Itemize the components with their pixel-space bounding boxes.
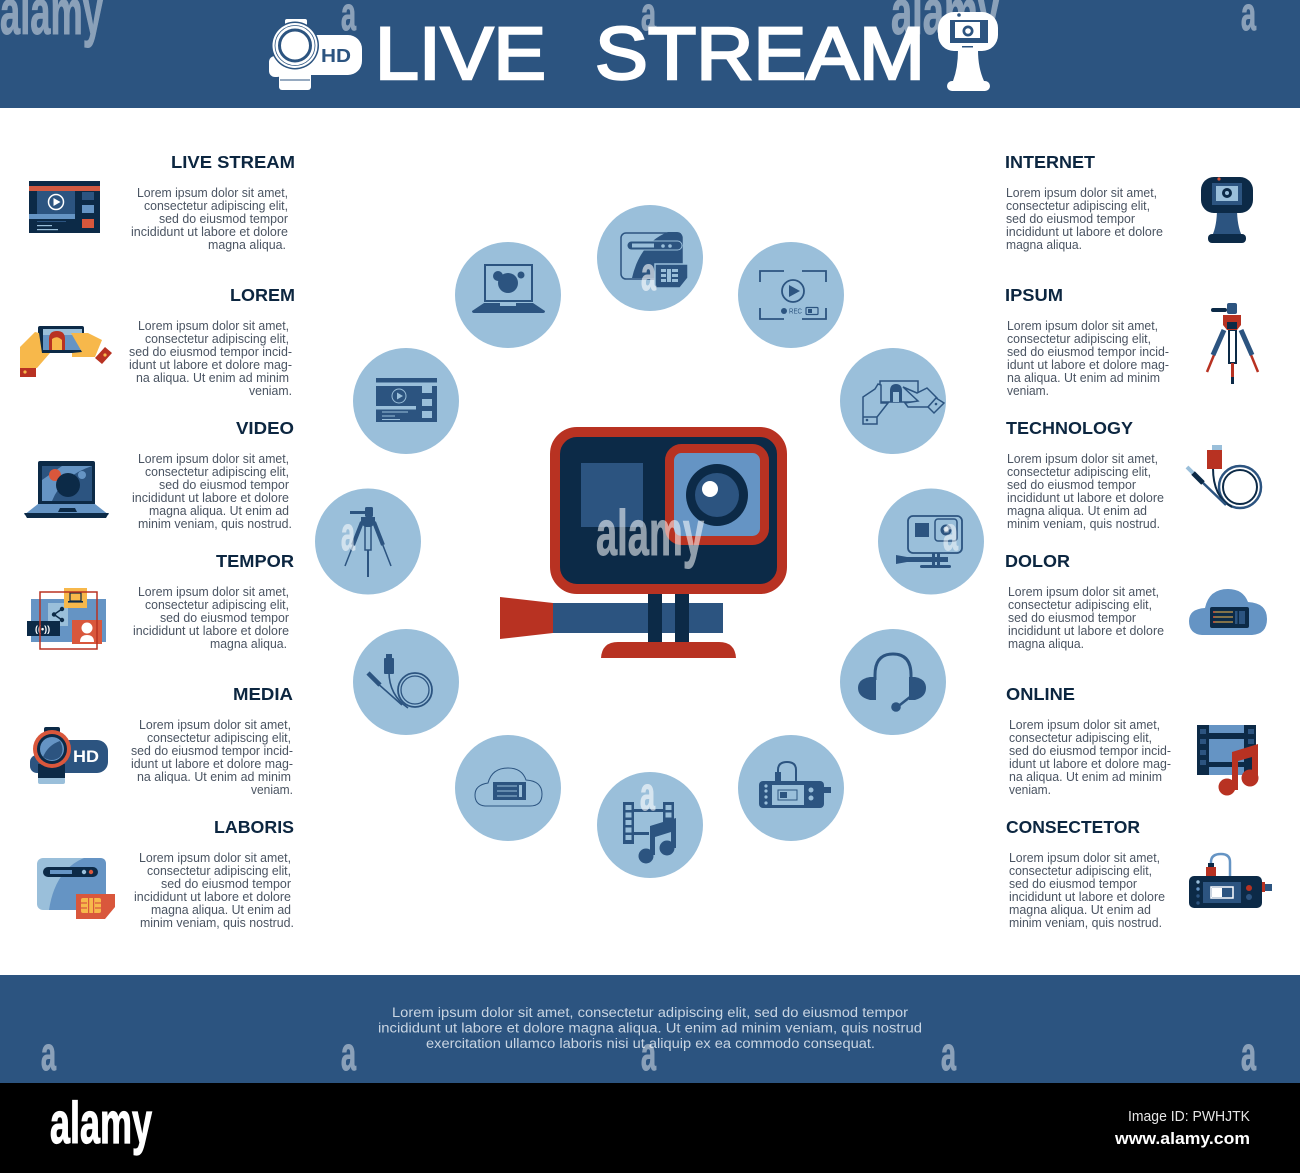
panel: live stream — [29, 152, 295, 252]
text block — [1007, 319, 1169, 398]
black credit bar: www.alamy.com — [1114, 1129, 1250, 1148]
text block: incididunt ut labore et dolore — [131, 225, 288, 239]
text block — [133, 585, 289, 651]
icon: video player — [29, 181, 100, 233]
text block: Lorem ipsum dolor sit amet, — [1009, 718, 1160, 732]
central action camera: alamy — [596, 497, 704, 569]
circle icon: cloud — [455, 735, 561, 841]
icon: hd camcorder — [30, 727, 108, 784]
text block: consectetur adipiscing elit, — [145, 332, 289, 346]
text block: magna aliqua. — [1008, 637, 1084, 651]
text block: Lorem ipsum dolor sit amet, — [137, 186, 288, 200]
text block: veniam. — [249, 384, 292, 398]
panel: video — [24, 418, 294, 531]
circle icon: film and music — [597, 767, 703, 878]
footer band — [0, 975, 1300, 1083]
text block: magna aliqua. Ut enim ad — [1009, 903, 1151, 917]
footer text: Lorem ipsum dolor sit amet, consectetur adipiscing elit, sed do eiusmod tempor — [392, 1005, 909, 1020]
heading: TECHNOLOGY — [1006, 418, 1133, 438]
icon: usb cable — [1187, 445, 1261, 508]
text block: sed do eiusmod tempor — [1007, 478, 1136, 492]
heading: ONLINE — [1006, 684, 1075, 704]
black credit bar: Image ID: PWHJTK — [1128, 1108, 1250, 1125]
circle icon: headset — [840, 629, 946, 735]
circle icon: battery device — [738, 735, 844, 841]
panel: tempor — [27, 551, 294, 651]
text block: idunt ut labore et dolore mag- — [131, 757, 293, 771]
text block: consectetur adipiscing elit, — [144, 199, 288, 213]
text block: Lorem ipsum dolor sit amet, — [139, 718, 291, 732]
text block: sed do eiusmod tempor — [1006, 212, 1135, 226]
black credit bar — [0, 1083, 1300, 1173]
icon: hd camcorder header: HD — [321, 45, 351, 66]
text block — [1009, 718, 1171, 797]
icon: social media share: ((•)) — [35, 624, 50, 634]
text block: sed do eiusmod tempor — [160, 611, 289, 625]
icon: hands holding phone — [20, 326, 112, 377]
icon: cloud storage — [1189, 589, 1267, 635]
panel: ipsum — [1005, 285, 1258, 398]
text block: Lorem ipsum dolor sit amet, — [1007, 452, 1158, 466]
circle icon: video player — [353, 348, 459, 454]
text block: sed do eiusmod tempor — [159, 478, 289, 492]
text block — [132, 452, 292, 531]
heading: DOLOR — [1005, 551, 1070, 571]
text block: Lorem ipsum dolor sit amet, — [139, 851, 291, 865]
footer text: incididunt ut labore et dolore magna aliqua. Ut enim ad minim veniam, quis nostrud — [378, 1020, 922, 1036]
heading: CONSECTETOR — [1006, 817, 1140, 837]
heading: INTERNET — [1005, 152, 1095, 172]
icon: battery device — [1189, 854, 1272, 908]
black credit bar: alamy — [50, 1091, 152, 1156]
footer band: a — [641, 1027, 656, 1080]
circle icon: sim router: a — [641, 247, 656, 300]
text block: idunt ut labore et dolore mag- — [1009, 757, 1171, 771]
text block: consectetur adipiscing elit, — [1008, 598, 1152, 612]
title — [375, 12, 925, 95]
circle icon: usb cable — [353, 629, 459, 735]
text block: veniam. — [251, 783, 293, 797]
text block: sed do eiusmod tempor incid- — [131, 744, 293, 758]
footer band: a — [941, 1027, 956, 1080]
footer text — [378, 1005, 922, 1051]
text block: Lorem ipsum dolor sit amet, — [1006, 186, 1157, 200]
panel: media — [30, 684, 293, 797]
text block: incididunt ut labore et dolore — [132, 491, 289, 505]
text block: Lorem ipsum dolor sit amet, — [138, 452, 289, 466]
icon: hd camcorder: HD — [73, 747, 99, 766]
text block: Lorem ipsum dolor sit amet, — [138, 585, 289, 599]
footer band: a — [341, 1027, 356, 1080]
text block — [1007, 452, 1164, 531]
text block — [1009, 851, 1165, 930]
circle icon: rec viewfinder: REC — [789, 308, 802, 316]
text block: incididunt ut labore et dolore — [134, 890, 291, 904]
text block: magna aliqua. — [208, 238, 286, 252]
text block: consectetur adipiscing elit, — [1007, 465, 1151, 479]
text block: idunt ut labore et dolore mag- — [129, 358, 292, 372]
text block: incididunt ut labore et dolore — [1006, 225, 1163, 239]
text block: consectetur adipiscing elit, — [1009, 731, 1152, 745]
panel: lorem — [20, 285, 295, 398]
circle icon: tripod: a — [341, 507, 355, 560]
circle icon: laptop — [455, 242, 561, 348]
text block — [129, 319, 292, 398]
text block: incididunt ut labore et dolore — [1008, 624, 1164, 638]
text block: sed do eiusmod tempor — [1009, 877, 1137, 891]
text block: incididunt ut labore et dolore — [1007, 491, 1164, 505]
circle icon: film and music: a — [640, 767, 655, 820]
text block: sed do eiusmod tempor — [159, 212, 288, 226]
central action camera — [500, 432, 782, 658]
title: LIVE — [375, 12, 546, 95]
text block: sed do eiusmod tempor incid- — [129, 345, 292, 359]
header band — [0, 0, 1300, 108]
heading: LABORIS — [214, 817, 294, 837]
circle icon: action camera: a — [943, 507, 958, 560]
title: STREAM — [595, 12, 925, 95]
text block: minim veniam, quis nostrud. — [138, 517, 292, 531]
text block — [1008, 585, 1164, 651]
text block: magna aliqua. Ut enim ad — [149, 504, 289, 518]
text block: idunt ut labore et dolore mag- — [1007, 358, 1169, 372]
text block: incididunt ut labore et dolore — [1009, 890, 1165, 904]
circle icon: tripod — [315, 488, 421, 594]
text block: veniam. — [1007, 384, 1049, 398]
icon: film and music note — [1197, 725, 1258, 796]
footer band: a — [1241, 1027, 1256, 1080]
text block: consectetur adipiscing elit, — [145, 598, 289, 612]
circle icon: rec viewfinder — [738, 242, 844, 348]
text block: minim veniam, quis nostrud. — [1007, 517, 1160, 531]
heading: TEMPOR — [216, 551, 294, 571]
heading: VIDEO — [236, 418, 294, 438]
footer text: exercitation ullamco laboris nisi ut aliquip ex ea commodo consequat. — [426, 1036, 875, 1051]
text block: Lorem ipsum dolor sit amet, — [138, 319, 289, 333]
heading: MEDIA — [233, 684, 293, 704]
text block: consectetur adipiscing elit, — [145, 465, 289, 479]
heading: LOREM — [230, 285, 295, 305]
icon: webcam header — [938, 12, 998, 91]
icon: router and sim card — [37, 858, 115, 919]
text block: na aliqua. Ut enim ad minim — [1007, 371, 1160, 385]
heading: IPSUM — [1005, 285, 1063, 305]
text block: sed do eiusmod tempor incid- — [1009, 744, 1171, 758]
panel: laboris — [37, 817, 294, 930]
circle icon: sim router — [597, 205, 703, 311]
text block: consectetur adipiscing elit, — [1006, 199, 1150, 213]
text block — [131, 718, 293, 797]
panel: online — [1006, 684, 1258, 797]
text block: veniam. — [1009, 783, 1051, 797]
text block: incididunt ut labore et dolore — [133, 624, 289, 638]
icon: webcam — [1201, 177, 1253, 243]
panel: consectetor — [1006, 817, 1272, 930]
panel: technology — [1006, 418, 1261, 531]
text block: Lorem ipsum dolor sit amet, — [1007, 319, 1158, 333]
text block: na aliqua. Ut enim ad minim — [137, 770, 291, 784]
text block: consectetur adipiscing elit, — [1009, 864, 1152, 878]
text block: minim veniam, quis nostrud. — [140, 916, 294, 930]
text block — [1006, 186, 1163, 252]
text block: Lorem ipsum dolor sit amet, — [1008, 585, 1159, 599]
text block: na aliqua. Ut enim ad minim — [1009, 770, 1162, 784]
circle icon: hands with phone — [840, 348, 946, 454]
icon: social media share — [27, 588, 106, 649]
icon: tripod — [1207, 303, 1258, 384]
text block — [134, 851, 294, 930]
text block — [131, 186, 288, 252]
text block: Lorem ipsum dolor sit amet, — [1009, 851, 1160, 865]
heading: LIVE STREAM — [171, 152, 295, 172]
text block: minim veniam, quis nostrud. — [1009, 916, 1162, 930]
text block: magna aliqua. Ut enim ad — [151, 903, 291, 917]
footer band: a — [41, 1027, 56, 1080]
text block: na aliqua. Ut enim ad minim — [136, 371, 289, 385]
text block: magna aliqua. Ut enim ad — [1007, 504, 1147, 518]
circle icon: action camera — [878, 488, 984, 594]
text block: consectetur adipiscing elit, — [147, 731, 291, 745]
text block: sed do eiusmod tempor — [161, 877, 291, 891]
panel: dolor — [1005, 551, 1267, 651]
icon: laptop — [24, 461, 109, 518]
text block: sed do eiusmod tempor — [1008, 611, 1136, 625]
text block: magna aliqua. — [1006, 238, 1082, 252]
panel: internet — [1005, 152, 1253, 252]
text block: consectetur adipiscing elit, — [1007, 332, 1151, 346]
text block: magna aliqua. — [210, 637, 287, 651]
text block: sed do eiusmod tempor incid- — [1007, 345, 1169, 359]
text block: consectetur adipiscing elit, — [147, 864, 291, 878]
icon: hd camcorder header — [269, 19, 362, 90]
